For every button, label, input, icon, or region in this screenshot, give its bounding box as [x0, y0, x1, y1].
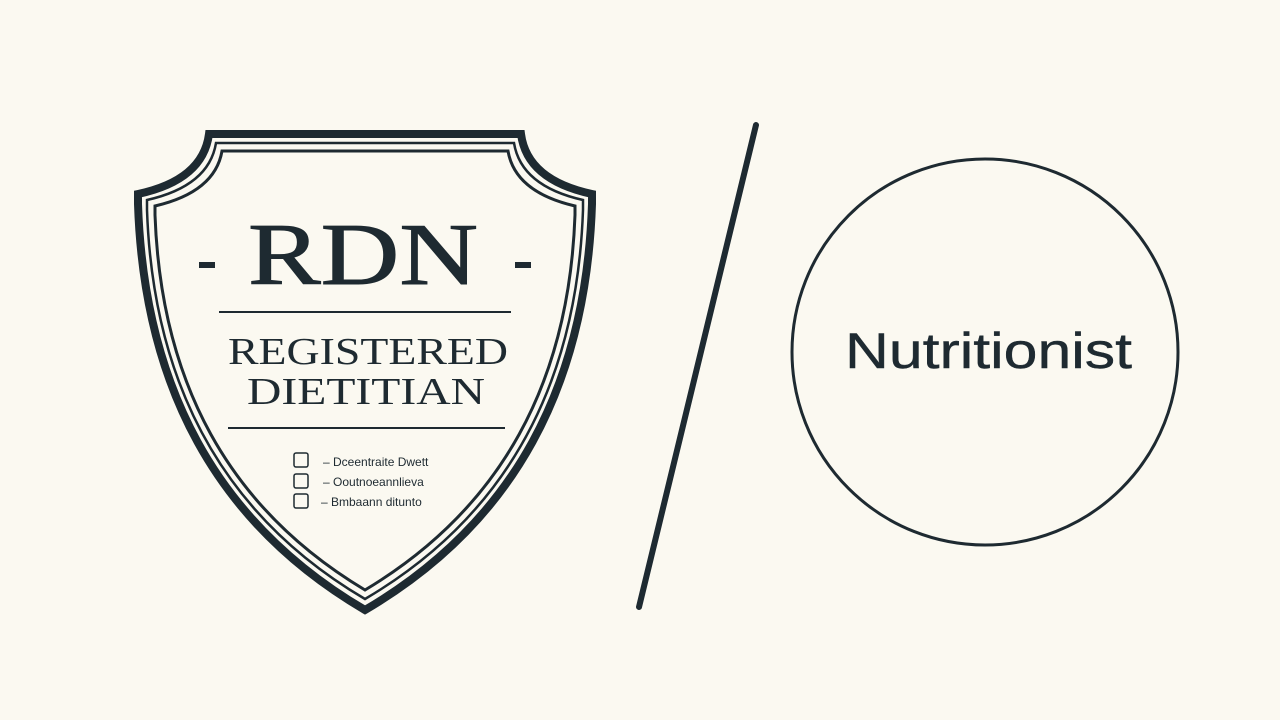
shield badge — [138, 134, 592, 610]
checklist: – Ooutnoeannlieva — [323, 475, 424, 489]
subtitle — [228, 331, 508, 413]
checklist: – Dceentraite Dwett — [323, 455, 429, 469]
checklist: – Bmbaann ditunto — [321, 495, 422, 509]
checklist — [294, 453, 429, 509]
RDN heading: RDN — [248, 207, 478, 304]
shield outline — [138, 134, 592, 610]
circle: nutritionist — [792, 159, 1178, 545]
circle: nutritionist: Nutritionist — [845, 323, 1132, 379]
slash divider — [639, 125, 756, 607]
dashes — [199, 262, 531, 268]
subtitle: REGISTERED — [228, 331, 508, 373]
dividers — [219, 312, 511, 428]
subtitle: DIETITIAN — [247, 371, 485, 413]
